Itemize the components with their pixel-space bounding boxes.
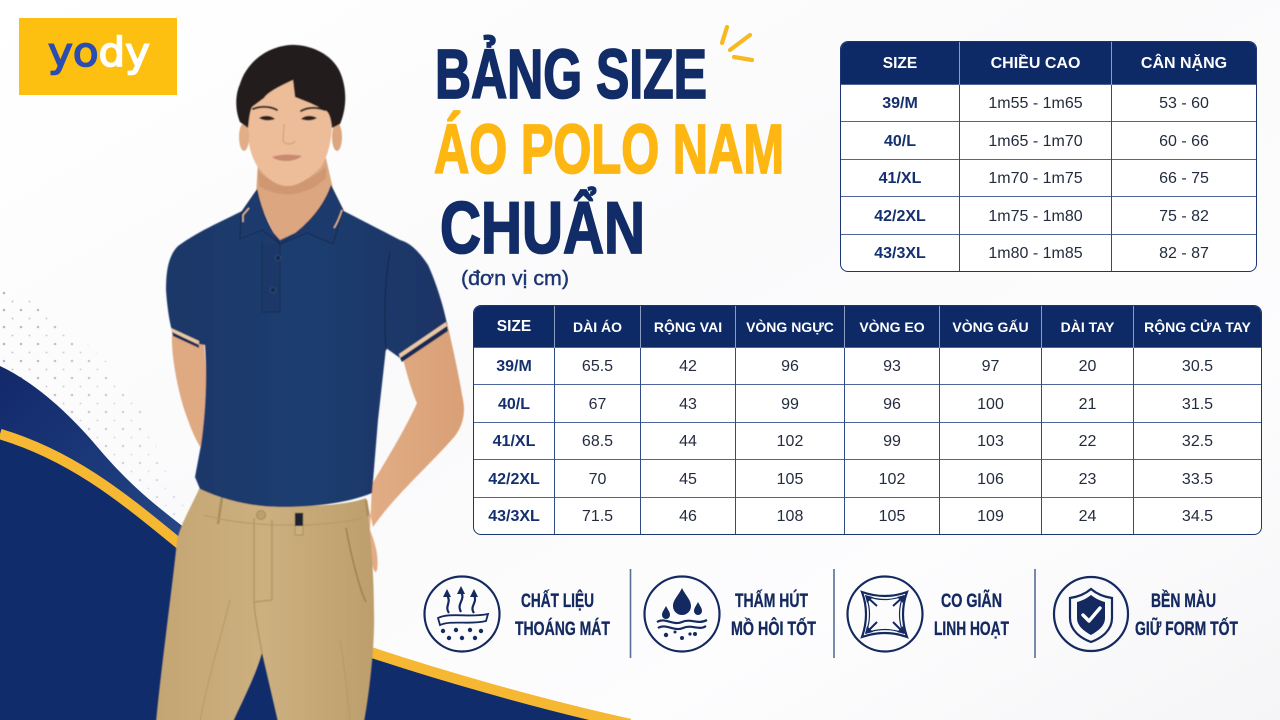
person: male model in navy polo and khaki trousers [156, 45, 464, 720]
label: breathable fabric: CHẤT LIỆU [521, 588, 594, 612]
face [247, 70, 332, 186]
right arm and hand [367, 322, 464, 572]
table: garment measurements by size: 20 [1079, 358, 1096, 375]
label: colour-fast shield: GIỮ FORM TỐT [1135, 616, 1238, 640]
table: height and weight by size: 43/3XL [874, 245, 926, 262]
table: garment measurements by size: 23 [1079, 471, 1096, 488]
label: sweat absorption: MỒ HÔI TỐT [731, 616, 816, 640]
table: garment measurements by size: 43/3XL [488, 508, 540, 525]
table: garment measurements by size [473, 305, 1262, 535]
table: garment measurements by size: 41/XL [493, 433, 535, 450]
table: height and weight by size: 1m70 - 1m75 [988, 170, 1083, 187]
label: breathable fabric [515, 588, 610, 640]
label: sweat absorption [731, 588, 816, 640]
hair [236, 45, 345, 128]
table: garment measurements by size: 40/L [498, 396, 530, 413]
table: garment measurements by size: 42 [679, 358, 697, 375]
label: breathable fabric: THOÁNG MÁT [515, 617, 610, 640]
label: stretch: LINH HOẠT [934, 618, 1009, 640]
table: height and weight by size: 75 - 82 [1159, 208, 1209, 225]
label: colour-fast shield [1135, 589, 1238, 640]
table: garment measurements by size: 45 [679, 471, 697, 488]
table: garment measurements by size: RỘNG VAI [654, 319, 722, 335]
table: garment measurements by size: SIZE [497, 318, 531, 335]
table: height and weight by size: 60 - 66 [1159, 133, 1209, 150]
table: garment measurements by size: 65.5 [582, 358, 613, 375]
table: garment measurements by size: 71.5 [582, 508, 613, 525]
swoosh: navy area [0, 434, 630, 720]
title sparkle accent [722, 27, 752, 60]
title [434, 35, 784, 269]
table: garment measurements by size: 100 [977, 396, 1004, 413]
table: garment measurements by size: DÀI ÁO [573, 319, 622, 335]
table: garment measurements by size: 102 [777, 433, 803, 450]
table: height and weight by size: 39/M [882, 95, 918, 112]
title: ÁO POLO NAM [434, 110, 784, 188]
title: CHUẨN [440, 188, 645, 269]
table: height and weight by size: 1m75 - 1m80 [988, 208, 1083, 225]
table: garment measurements by size: VÒNG GẤU [952, 319, 1029, 335]
table: garment measurements by size: 43 [679, 396, 697, 413]
table: garment measurements by size: 106 [977, 471, 1004, 488]
table: garment measurements by size: 97 [982, 358, 999, 375]
table: height and weight by size: CÂN NẶNG [1141, 55, 1227, 72]
neck [256, 158, 336, 246]
table: height and weight by size: 53 - 60 [1159, 95, 1209, 112]
eyebrows, eyes, nose, mouth [253, 107, 325, 111]
polo shirt [166, 207, 447, 507]
right cuff [399, 322, 447, 358]
left cuff [171, 328, 199, 344]
collar [240, 190, 280, 244]
table: garment measurements by size: 22 [1079, 433, 1096, 450]
feature dividers [630, 569, 1035, 658]
trousers [156, 487, 374, 720]
left arm [172, 335, 208, 448]
table: garment measurements by size: 32.5 [1182, 433, 1213, 450]
icon: breathable fabric [424, 576, 500, 652]
logo: yody: yody [48, 30, 150, 76]
label: sweat absorption: THẤM HÚT [735, 588, 808, 612]
logo: yody [19, 18, 177, 95]
table: garment measurements by size: 46 [679, 508, 697, 525]
table: garment measurements by size: 103 [977, 433, 1004, 450]
table: height and weight by size: 40/L [884, 133, 916, 150]
table: garment measurements by size: 21 [1079, 396, 1096, 413]
halftone dot pattern [2, 292, 184, 524]
table: garment measurements by size: 42/2XL [488, 471, 540, 488]
unit note: (đơn vị cm) [461, 268, 569, 290]
table: garment measurements by size: VÒNG NGỰC [746, 319, 834, 335]
swoosh: gold stripe [0, 434, 630, 720]
table: height and weight by size: 1m65 - 1m70 [988, 133, 1083, 150]
table: height and weight by size: 41/XL [879, 170, 921, 187]
swoosh: lighter blue band [0, 366, 200, 560]
table: height and weight by size: CHIỀU CAO [991, 55, 1080, 72]
table: garment measurements by size: 44 [679, 433, 697, 450]
table: garment measurements by size: 68.5 [582, 433, 613, 450]
table: garment measurements by size: 99 [781, 396, 799, 413]
table: garment measurements by size: 96 [781, 358, 799, 375]
table: height and weight by size: 1m80 - 1m85 [988, 245, 1083, 262]
table: height and weight by size: SIZE [883, 55, 917, 72]
table: garment measurements by size: 70 [589, 471, 606, 488]
table: garment measurements by size: 34.5 [1182, 508, 1213, 525]
label: stretch [934, 589, 1009, 640]
title: BẢNG SIZE [435, 35, 707, 113]
table: height and weight by size: 1m55 - 1m65 [988, 95, 1083, 112]
table: garment measurements by size: 30.5 [1182, 358, 1213, 375]
polo placket and buttons [262, 243, 281, 312]
table: garment measurements by size: 96 [883, 396, 901, 413]
table: garment measurements by size: 31.5 [1182, 396, 1213, 413]
table: garment measurements by size: 109 [977, 508, 1004, 525]
icon: colour-fast shield [1054, 577, 1128, 651]
table: garment measurements by size: DÀI TAY [1061, 319, 1114, 335]
table: garment measurements by size: 108 [777, 508, 803, 525]
table: garment measurements by size: VÒNG EO [859, 319, 925, 335]
table: height and weight by size: 82 - 87 [1159, 245, 1209, 262]
label: colour-fast shield: BỀN MÀU [1151, 589, 1216, 612]
icon: stretch [848, 576, 922, 652]
table: garment measurements by size: 67 [589, 396, 606, 413]
table: garment measurements by size: 105 [777, 471, 803, 488]
table: garment measurements by size: 99 [883, 433, 901, 450]
table: garment measurements by size: 102 [879, 471, 905, 488]
table: height and weight by size: 66 - 75 [1159, 170, 1209, 187]
table: garment measurements by size: 39/M [496, 358, 532, 375]
ears [239, 123, 249, 151]
table: garment measurements by size: 33.5 [1182, 471, 1213, 488]
table: garment measurements by size: 24 [1079, 508, 1096, 525]
label: stretch: CO GIÃN [941, 589, 1002, 612]
table: garment measurements by size: 93 [883, 358, 901, 375]
table: height and weight by size: 42/2XL [874, 208, 926, 225]
icon: sweat absorption [644, 576, 720, 652]
table: garment measurements by size: RỘNG CỬA TAY [1144, 319, 1251, 335]
table: garment measurements by size: 105 [879, 508, 905, 525]
table: height and weight by size [840, 41, 1257, 272]
